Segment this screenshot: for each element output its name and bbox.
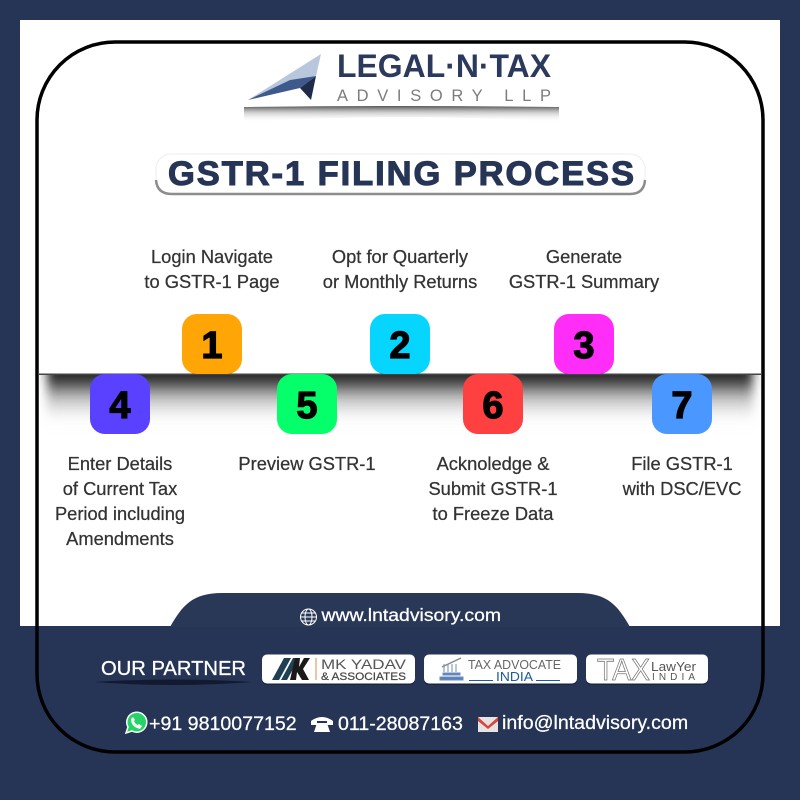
logo wordmark: LEGAL·N·TAX <box>337 48 552 84</box>
step 6 <box>428 374 558 524</box>
our partner label: OUR PARTNER <box>101 658 246 680</box>
icon: globe <box>300 609 316 625</box>
step 3: Generate <box>546 246 622 267</box>
step 3: GSTR-1 Summary <box>509 271 660 292</box>
step 6: Submit GSTR-1 <box>428 478 558 499</box>
step 5: 5 <box>296 385 318 427</box>
step 4: Period including <box>55 503 185 524</box>
title pill <box>156 154 645 194</box>
step 2 <box>323 246 477 374</box>
partner: Tax Lawyer India <box>586 652 708 687</box>
step 6: 6 <box>482 385 504 427</box>
icon: whatsapp <box>126 712 147 733</box>
step 7: 7 <box>671 385 693 427</box>
white panel <box>20 20 780 626</box>
step 5 <box>238 374 376 474</box>
partner: Tax Lawyer India: LawYer <box>651 659 697 674</box>
step 4: 4 <box>109 385 131 427</box>
contact: email <box>478 712 688 734</box>
contact: phone whatsapp <box>126 712 297 735</box>
icon: telephone <box>311 717 333 732</box>
partner: MK Yadav <box>262 654 415 685</box>
logo <box>244 48 559 122</box>
partner: MK Yadav: MK YADAV <box>321 656 407 672</box>
logo shadow bar <box>244 106 559 122</box>
icon: mail <box>478 717 498 732</box>
partner: Tax Lawyer India: TAX <box>597 652 650 687</box>
contact: landline <box>311 713 463 735</box>
footer tab <box>170 593 630 627</box>
timeline shadow line <box>39 374 761 418</box>
step 1: 1 <box>201 325 223 367</box>
partner: Tax Advocate India: INDIA <box>496 670 534 684</box>
step 4: Amendments <box>66 528 174 549</box>
website text: www.lntadvisory.com <box>320 605 501 625</box>
partner: Tax Advocate India: TAX ADVOCATE <box>468 657 561 672</box>
step 2: 2 <box>389 325 411 367</box>
title text: GSTR-1 FILING PROCESS <box>168 155 634 193</box>
step 4: Enter Details <box>68 453 172 474</box>
step 7 <box>622 374 741 499</box>
step 2: or Monthly Returns <box>323 271 477 292</box>
icon: paper plane <box>248 54 321 100</box>
step 6: to Freeze Data <box>433 503 554 524</box>
step 2: Opt for Quarterly <box>332 246 469 267</box>
step 1 <box>144 246 280 374</box>
step 4 <box>55 374 185 549</box>
step 1: to GSTR-1 Page <box>144 271 280 292</box>
website <box>300 605 501 625</box>
partner: Tax Advocate India <box>424 654 577 685</box>
step 7: with DSC/EVC <box>622 478 741 499</box>
step 6: Acknoledge & <box>437 453 549 474</box>
partner: MK Yadav: & ASSOCIATES <box>321 671 406 683</box>
step 4: of Current Tax <box>63 478 177 499</box>
partner: Tax Lawyer India: INDIA <box>652 672 695 683</box>
step 7: File GSTR-1 <box>631 453 733 474</box>
phone number: +91 9810077152 <box>149 713 297 735</box>
step 3 <box>509 246 660 374</box>
step 1: Login Navigate <box>151 246 273 267</box>
email text: info@lntadvisory.com <box>502 712 688 734</box>
step 3: 3 <box>573 325 595 367</box>
logo subtitle: ADVISORY LLP <box>337 87 551 105</box>
step 5: Preview GSTR-1 <box>238 453 376 474</box>
landline number: 011-28087163 <box>338 713 463 735</box>
